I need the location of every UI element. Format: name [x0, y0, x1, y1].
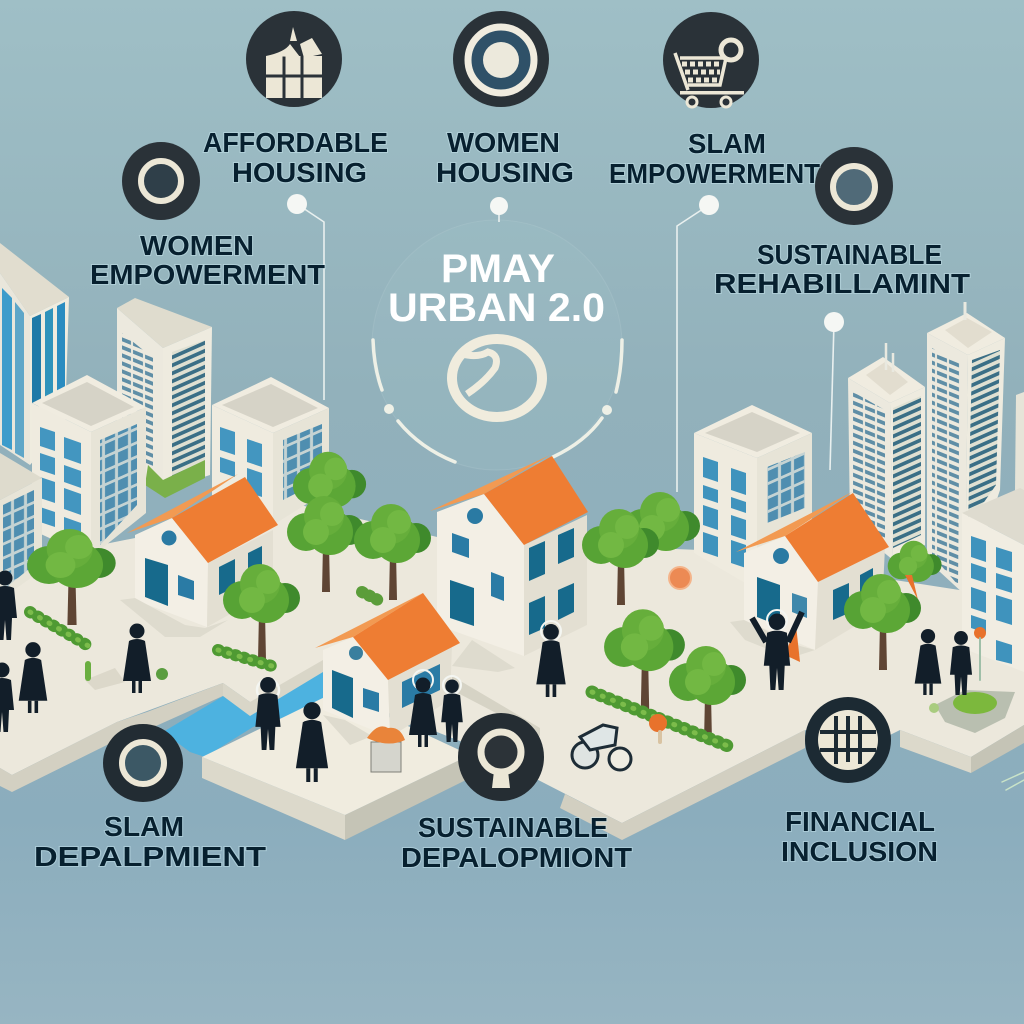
label: slam empowerment: SLAM — [688, 128, 766, 159]
icon: slam empowerment cart — [663, 12, 759, 108]
far left glass tower — [0, 243, 69, 465]
icon: financial inclusion — [805, 697, 891, 783]
right tower one — [848, 343, 925, 560]
label: women empowerment — [90, 230, 325, 290]
label: slam empowerment — [609, 128, 820, 189]
ground: left slab side — [0, 683, 225, 792]
label: slam development — [34, 811, 266, 872]
far left low building — [0, 453, 42, 600]
label: affordable housing: AFFORDABLE — [203, 127, 388, 158]
right foreground building — [962, 488, 1024, 672]
basket prop — [367, 726, 405, 772]
label: affordable housing: HOUSING — [232, 157, 367, 188]
label: slam empowerment: EMPOWERMENT — [609, 158, 820, 189]
icon: slam development — [103, 724, 183, 802]
icon: sustainable rehabilitation — [815, 147, 893, 225]
ground: upper plaza — [0, 505, 1024, 823]
title: PMAY — [441, 247, 555, 291]
back bushes — [293, 452, 942, 600]
house 1 — [120, 474, 278, 637]
label: financial inclusion — [781, 806, 938, 867]
house 2 centre — [430, 455, 588, 672]
icon: women housing — [453, 11, 549, 107]
bicycle — [572, 725, 631, 770]
mid-rise building behind houses — [212, 377, 329, 525]
label: financial inclusion: INCLUSION — [781, 836, 938, 867]
ground: front centre slab — [202, 692, 470, 840]
label: women housing: HOUSING — [436, 157, 574, 188]
label: sustainable rehabilitation: REHABILLAMINT — [714, 268, 970, 299]
ground: centre right slab side — [560, 730, 805, 840]
icon: affordable housing — [246, 11, 342, 107]
hedges and flowers — [30, 567, 1024, 790]
cash prop — [929, 690, 1015, 733]
right mid-rise building — [694, 405, 812, 590]
label: affordable housing — [203, 127, 388, 188]
water channel — [163, 662, 323, 757]
pins and connector lines — [287, 194, 844, 492]
left tower behind — [117, 298, 212, 498]
central emblem — [452, 339, 542, 417]
label: women empowerment: WOMEN — [140, 230, 254, 261]
icon: sustainable development — [458, 713, 544, 801]
left mid-rise building — [32, 375, 146, 557]
label: sustainable development: DEPALOPMIONT — [401, 842, 632, 873]
label: sustainable development — [401, 812, 632, 873]
label: women empowerment: EMPOWERMENT — [90, 259, 325, 290]
label: slam development: SLAM — [104, 811, 184, 842]
label: women housing: WOMEN — [447, 127, 560, 158]
icon: women empowerment — [122, 142, 200, 220]
title: URBAN 2.0 — [388, 286, 605, 330]
label: slam development: DEPALPMIENT — [34, 841, 266, 872]
title — [388, 247, 605, 330]
label: women housing — [436, 127, 574, 188]
right tower two — [927, 302, 1024, 595]
ground: right slab side — [900, 725, 1024, 773]
ground: back plaza side — [223, 660, 323, 716]
central circle with arc segments — [372, 220, 622, 470]
label: sustainable rehabilitation — [714, 239, 970, 299]
house 4 front — [315, 593, 460, 745]
trees — [27, 496, 921, 742]
label: sustainable development: SUSTAINABLE — [418, 812, 608, 843]
label: sustainable rehabilitation: SUSTAINABLE — [757, 239, 942, 270]
house 3 right — [730, 492, 889, 658]
people — [0, 570, 972, 782]
label: financial inclusion: FINANCIAL — [785, 806, 935, 837]
